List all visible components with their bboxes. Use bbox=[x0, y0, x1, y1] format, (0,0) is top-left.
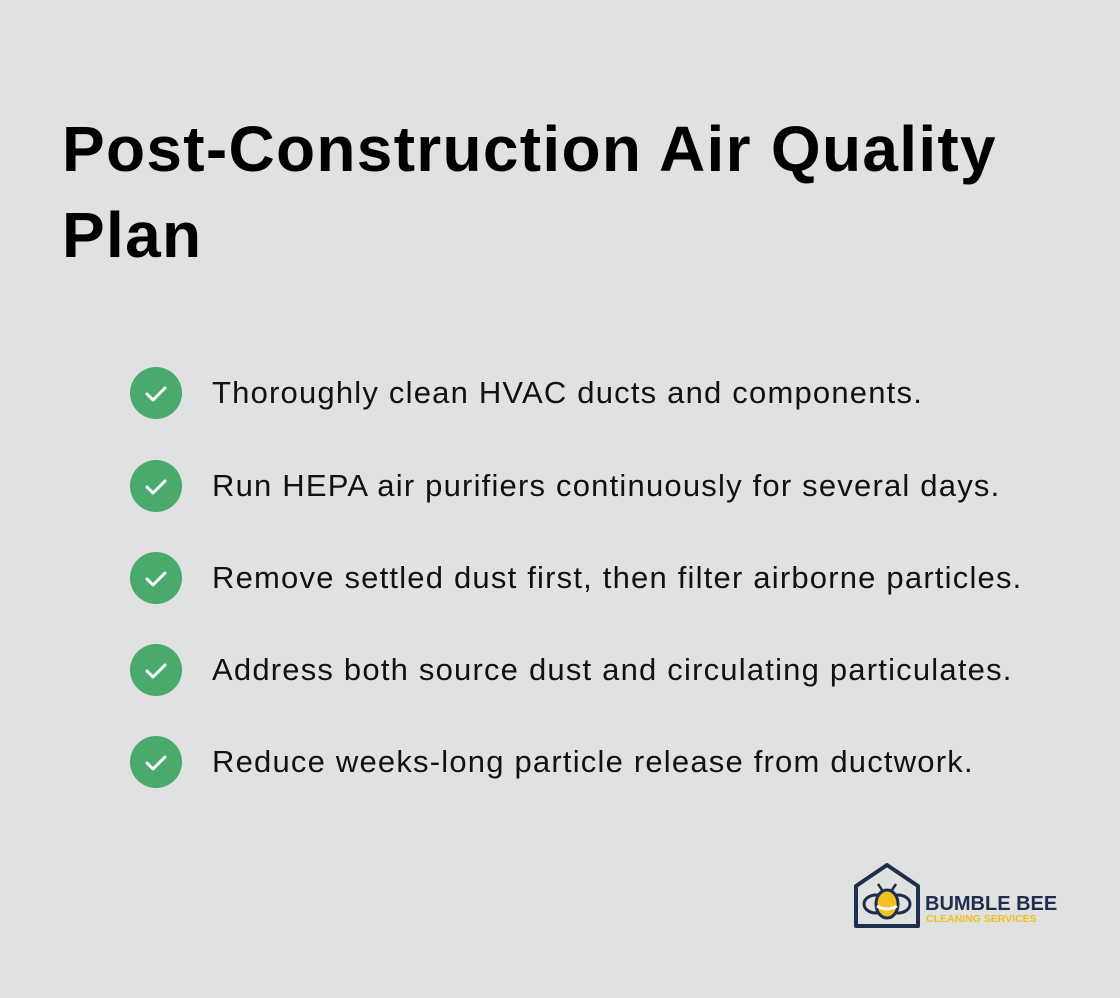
item 4: Address both source dust and circulating particulates. bbox=[212, 652, 1013, 687]
item 1: Thoroughly clean HVAC ducts and components. bbox=[212, 375, 923, 410]
item 4 bbox=[130, 644, 1013, 696]
icon: house with bee bbox=[856, 865, 918, 926]
logo bbox=[854, 863, 1057, 928]
item 5 bbox=[130, 736, 974, 788]
logo: CLEANING SERVICES bbox=[926, 913, 1037, 925]
title: Post-Construction Air Quality bbox=[62, 113, 997, 185]
title bbox=[62, 113, 997, 271]
item 2 bbox=[130, 460, 1000, 512]
item 2: Run HEPA air purifiers continuously for several days. bbox=[212, 468, 1000, 503]
brand text: BUMBLE BEE bbox=[925, 893, 1057, 915]
item 5: Reduce weeks-long particle release from ductwork. bbox=[212, 744, 974, 779]
title: Plan bbox=[62, 199, 202, 271]
item 3 bbox=[130, 552, 1022, 604]
item 1 bbox=[130, 367, 923, 419]
item 3: Remove settled dust first, then filter airborne particles. bbox=[212, 560, 1022, 595]
